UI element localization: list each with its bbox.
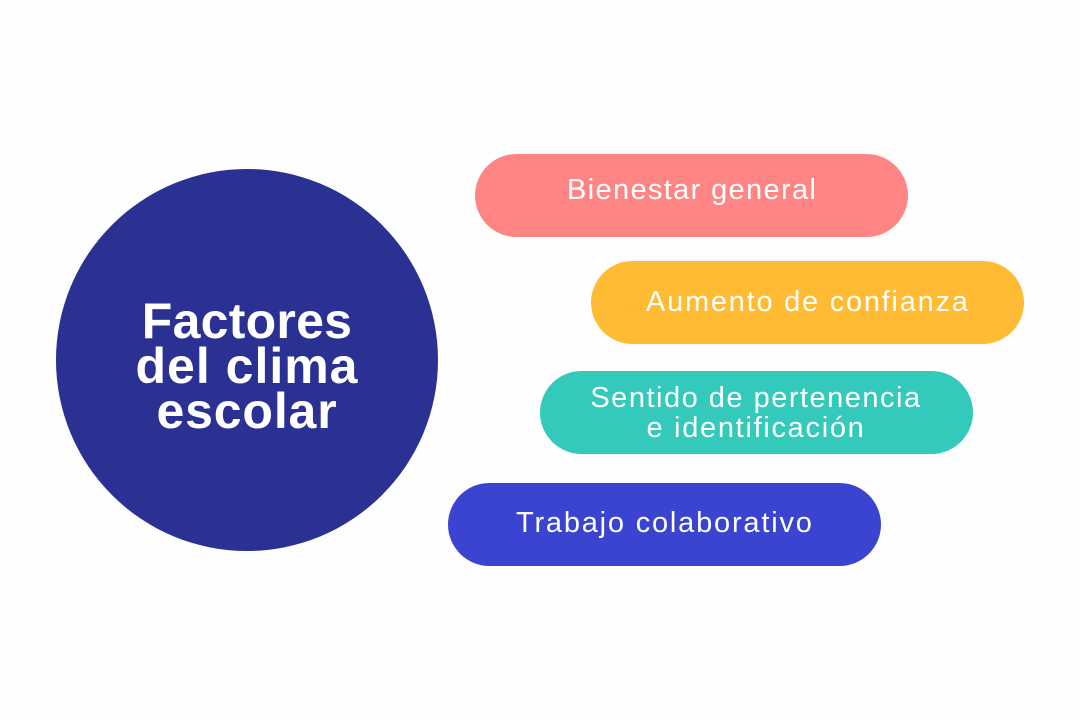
label: Sentido de pertenencia e identificación: e identificación [646,412,866,444]
label: Bienestar general: Bienestar general [567,174,817,206]
pill: Trabajo colaborativo [448,483,881,566]
label: Sentido de pertenencia e identificación [590,382,922,444]
label: Aumento de confianza: Aumento de confianza [646,286,970,318]
label: Trabajo colaborativo: Trabajo colaborativo [516,507,814,539]
pill: Sentido de pertenencia e identificación [540,371,973,454]
title: del clima [136,338,358,394]
title [136,293,358,439]
pill: Bienestar general [475,154,908,237]
pill: Aumento de confianza [591,261,1024,344]
title: Factores [142,293,352,349]
label: Sentido de pertenencia e identificación: Sentido de pertenencia [590,382,922,414]
title: escolar [156,383,338,439]
circle: Factores del clima escolar [56,169,438,551]
